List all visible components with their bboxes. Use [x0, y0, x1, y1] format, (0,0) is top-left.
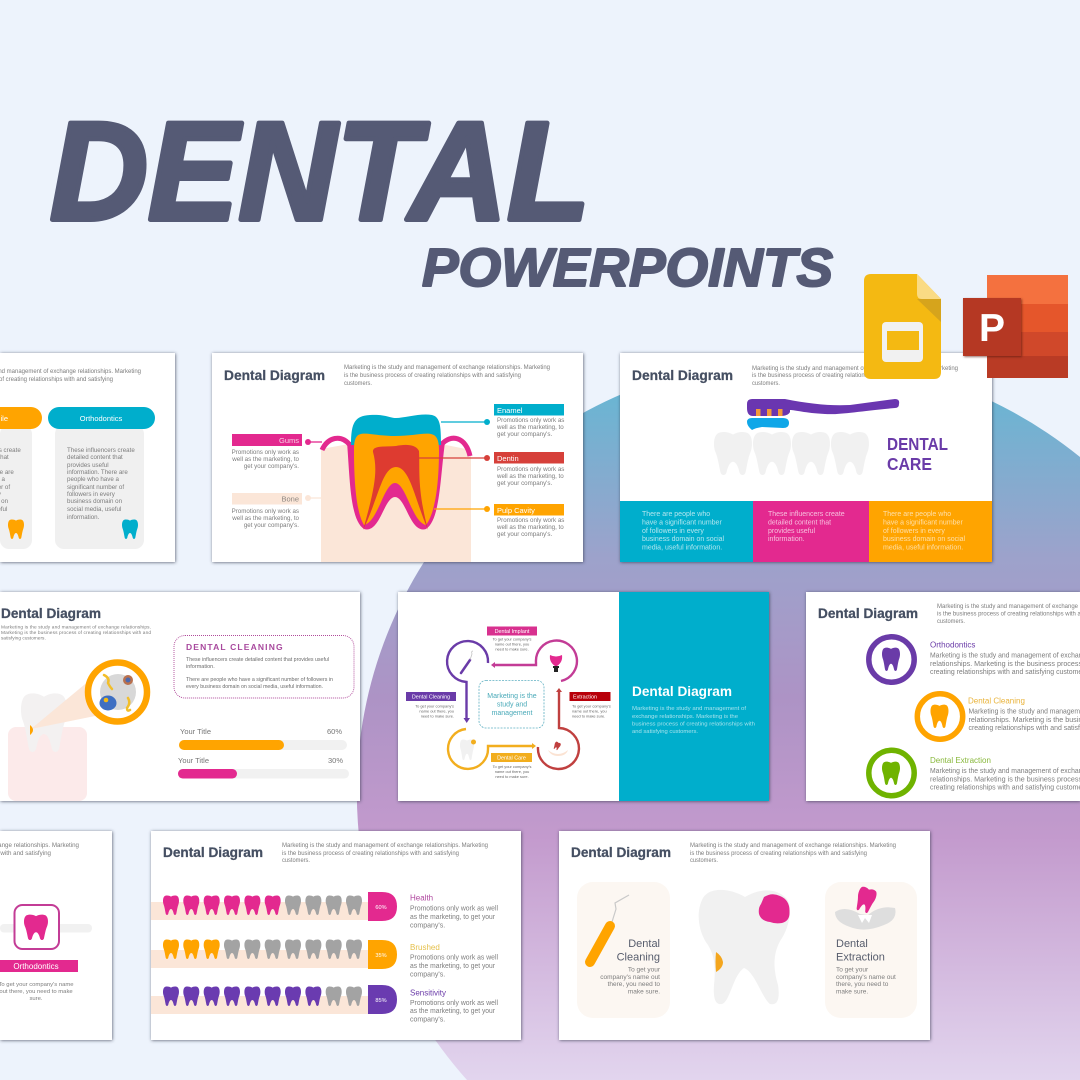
- callout: dental cleaning: DENTAL CLEANING: [186, 642, 284, 652]
- label: Dental Implant: need to make sure.: [495, 646, 529, 652]
- panel: orange: There are people who: [883, 511, 951, 518]
- progress bar: 60%: [179, 727, 347, 750]
- card title: Cleaning: [617, 952, 660, 964]
- card text: To get your: [628, 966, 661, 974]
- arrow head: pink: [491, 662, 495, 668]
- arrow head: red: [556, 688, 562, 692]
- item: Brushed: Promotions only work as well: [410, 954, 498, 962]
- panel: orange: of followers in every: [883, 528, 945, 535]
- right card text: provides useful: [67, 462, 109, 469]
- cycle arc: pink: [494, 641, 577, 681]
- teal side panel: [619, 592, 769, 801]
- center dashed box: Marketing is the: [487, 693, 537, 700]
- slide 7 caption: sure.: [29, 996, 43, 1002]
- label: Extraction: Extraction: [573, 694, 597, 700]
- slide 3 intro text: is the business process of creating relationships with and satisfying: [752, 372, 930, 379]
- slide 2 intro text: is the business process of creating relationships with and satisfying: [344, 372, 522, 379]
- progress bar: 30%: Your Title: [178, 756, 209, 765]
- right card text: people who have a: [67, 476, 120, 483]
- card: Dental Cleaning: [577, 882, 670, 1018]
- label: Bone: well as the marketing, to: [231, 515, 300, 522]
- item: Sensitivity: as the marketing, to get your: [410, 1008, 496, 1015]
- subtitle: POWERPOINTS: POWERPOINTS: [422, 238, 833, 298]
- item: Health: [410, 894, 498, 930]
- cycle arc: purple: [447, 641, 488, 719]
- slide 2 intro text: [344, 364, 551, 387]
- card text: company's name out: [836, 974, 896, 981]
- label: Gums: Promotions only work as: [232, 449, 299, 456]
- label: Pulp Cavity: Promotions only work as: [497, 517, 564, 524]
- slide 7 caption: [0, 982, 74, 1002]
- label: Pulp Cavity: Pulp Cavity: [497, 506, 535, 515]
- icon: dental tool: [461, 651, 473, 673]
- icon: teal tooth: [122, 519, 138, 539]
- panel: pink: detailed content that: [768, 520, 831, 526]
- panel: pink: information.: [768, 536, 805, 543]
- decorative gradient circle: [357, 358, 1080, 1080]
- label: Dentin: well as the marketing, to: [496, 473, 564, 480]
- icon: tooth with spot: [460, 739, 476, 760]
- label: Dental Care: [491, 753, 532, 779]
- arrow head: orange: [532, 743, 536, 749]
- label: Dental Cleaning: To get your company's: [415, 704, 454, 708]
- label bar: Orthodontics: Orthodontics: [13, 962, 59, 971]
- teal side panel: exchange relationships. Marketing is the: [632, 714, 738, 720]
- right card text: information. There are: [67, 469, 128, 476]
- label: Enamel: well as the marketing, to: [496, 424, 564, 431]
- item: Brushed: [410, 943, 498, 978]
- slide 8 heading: Dental Diagram: [163, 845, 263, 860]
- label: Dentin: [419, 452, 564, 487]
- card title: [617, 938, 660, 964]
- tooth cross-section: [322, 415, 470, 530]
- item: Dental Extraction: [930, 756, 1080, 792]
- item: Sensitivity: Sensitivity: [410, 988, 446, 998]
- label: Dental Cleaning: need to make sure.: [421, 714, 454, 718]
- card text: company's name out: [600, 974, 660, 981]
- slide 2: tooth anatomy: [212, 353, 583, 562]
- label: Extraction: [570, 692, 611, 718]
- pill: Orthodontics: [48, 407, 155, 429]
- label: Enamel: Enamel: [497, 406, 523, 415]
- item: Health: Promotions only work as well: [410, 906, 498, 912]
- slide 9 intro text: Marketing is the study and management of exchange relationships. Marketing: [690, 842, 897, 849]
- slide 8 intro text: is the business process of creating relationships with and satisfying: [282, 850, 460, 857]
- card text: To get your: [836, 966, 869, 974]
- callout: dental cleaning: [174, 636, 354, 698]
- title: DENTAL: DENTAL: [50, 92, 590, 250]
- panel: teal: There are people who: [642, 511, 710, 518]
- label: Dentin: Dentin: [497, 454, 519, 463]
- label: Gums: well as the marketing, to: [231, 456, 300, 463]
- slide 3: dental care: [620, 353, 992, 562]
- panel: teal: have a significant number: [642, 520, 722, 526]
- slide 8 intro text: Marketing is the study and management of exchange relationships. Marketing: [282, 842, 489, 849]
- slide 1: pill cards (cropped): [0, 353, 175, 562]
- item: Sensitivity: [410, 988, 498, 1024]
- icon: tooth in rounded square: [14, 905, 59, 949]
- icon: hand with extracted tooth: [548, 741, 568, 756]
- label: Bone: Bone: [281, 494, 299, 504]
- label: Bone: Promotions only work as: [232, 508, 299, 515]
- pill: Smile: [0, 407, 42, 429]
- cycle arc: red: [538, 691, 579, 769]
- label: Pulp Cavity: get your company's.: [497, 531, 552, 538]
- DENTAL CARE label: DENTAL: [887, 434, 948, 454]
- icon: orange tooth: [8, 519, 24, 539]
- slide 4: dental cleaning: [0, 592, 360, 801]
- right card text: [67, 447, 135, 521]
- card: Dental Extraction: [825, 882, 917, 1018]
- center dashed box: [479, 680, 544, 728]
- label: Extraction: name out there, you: [572, 708, 607, 714]
- label: Enamel: [441, 404, 564, 438]
- label: Pulp Cavity: well as the marketing, to: [496, 524, 564, 531]
- panel: teal: [620, 501, 753, 562]
- label: Dental Care: To get your company's: [493, 764, 531, 769]
- item: Dental Extraction: Dental Extraction: [930, 756, 991, 765]
- slide 5: cycle diagram: [398, 592, 769, 801]
- slide 7: orthodontics (cropped): [0, 831, 112, 1040]
- slide 7 caption: out there, you need to make: [0, 989, 73, 995]
- card title: [836, 938, 885, 964]
- plaque: orange: [716, 952, 723, 972]
- slide 4 heading: Dental Diagram: [1, 606, 101, 621]
- label: Gums: get your company's.: [244, 463, 299, 470]
- slide 9 intro text: is the business process of creating relationships with and satisfying: [690, 850, 868, 857]
- item: Health: Health: [410, 894, 433, 902]
- callout: dental cleaning: information.: [186, 664, 215, 670]
- panel: teal: business domain on social: [642, 536, 725, 543]
- card title: Dental: [628, 938, 660, 950]
- right card text: significant number of: [67, 484, 124, 491]
- label: Dental Cleaning: name out there, you: [419, 708, 454, 714]
- panel: pink: [753, 501, 869, 562]
- gray card left: [0, 425, 32, 549]
- pictogram row: 35%: 35%: [375, 953, 387, 959]
- label: Enamel: get your company's.: [497, 431, 552, 438]
- callout: dental cleaning: every business domain on social media, useful information.: [186, 684, 323, 690]
- panel: pink: provides useful: [768, 528, 816, 535]
- label: Extraction: To get your company's: [572, 704, 611, 708]
- card text: make sure.: [836, 988, 868, 996]
- left card text: [0, 447, 21, 513]
- right card text: detailed content that: [67, 454, 123, 461]
- slide 6 intro text: customers.: [937, 618, 965, 625]
- pictogram row: 60%: [151, 892, 397, 921]
- panel: pink: These influencers create: [768, 511, 845, 518]
- center dashed box: study and: [497, 702, 527, 708]
- large tooth: [699, 890, 790, 1004]
- slide 2 intro text: Marketing is the study and management of exchange relationships. Marketing: [344, 364, 551, 371]
- label: Dental Implant: To get your company's: [493, 636, 531, 642]
- item: Sensitivity: company's.: [410, 1016, 445, 1024]
- right card text: information.: [67, 514, 100, 521]
- arrow head: purple: [464, 718, 470, 723]
- label: Dental Care: need to make sure.: [495, 774, 529, 779]
- item: Sensitivity: Promotions only work as well: [410, 1000, 498, 1007]
- DENTAL CARE label: CARE: [887, 454, 932, 474]
- item: Dental Cleaning: [968, 696, 1080, 732]
- label: Pulp Cavity: [434, 504, 564, 538]
- slide 3 intro text: customers.: [752, 380, 780, 387]
- pictogram row: 60%: 60%: [375, 905, 387, 911]
- card text: [600, 966, 661, 996]
- slide 8 intro text: customers.: [282, 857, 310, 864]
- slide 1 intro text: [0, 368, 142, 383]
- panel: orange: media, useful information.: [883, 544, 963, 552]
- slide 3 intro text: [752, 365, 959, 387]
- label: Dental Care: name out there, you: [495, 769, 529, 774]
- label: Bone: get your company's.: [244, 522, 299, 529]
- slide 2 intro text: customers.: [344, 380, 372, 387]
- illustration: magnified tooth germs: [8, 662, 147, 801]
- slide 9 intro text: [690, 842, 897, 864]
- label: Dental Implant: name out there, you: [495, 642, 529, 646]
- teal side panel: business process of creating relationships with: [632, 722, 755, 728]
- cavity: pink: [759, 894, 790, 923]
- slide 4 intro text: Marketing is the study and management of exchange relationships.: [1, 624, 151, 630]
- progress bar: 60%: 60%: [327, 727, 342, 736]
- icon: implant: [550, 655, 562, 672]
- row of pale teeth: [714, 432, 869, 475]
- pictogram row: 35%: [151, 939, 397, 969]
- item: Brushed: company's.: [410, 972, 445, 978]
- icon: orange tooth circle: [917, 694, 963, 739]
- slide 6 intro text: [937, 603, 1080, 625]
- gray card right: [55, 425, 144, 549]
- label: Dental Care: Dental Care: [497, 756, 526, 762]
- pill: Orthodontics: Orthodontics: [80, 414, 123, 423]
- progress bar: 60%: Your Title: [180, 727, 211, 736]
- card title: Extraction: [836, 952, 885, 964]
- label: Dental Cleaning: Dental Cleaning: [412, 694, 450, 700]
- panel: teal: of followers in every: [642, 528, 704, 535]
- item: Dental Cleaning: Dental Cleaning: [968, 696, 1025, 706]
- label: Gums: [231, 434, 322, 470]
- item: Orthodontics: [930, 640, 1080, 676]
- label: Dental Implant: [487, 626, 537, 652]
- toothpaste: [747, 418, 789, 430]
- slide 7 intro text: [0, 842, 80, 857]
- gray track: [0, 924, 92, 932]
- item: Health: as the marketing, to get your: [410, 914, 496, 921]
- label: Dental Cleaning: [406, 692, 456, 718]
- card title: Dental: [836, 938, 868, 950]
- panel: orange: business domain on social: [883, 536, 966, 543]
- slide 3 heading: Dental Diagram: [632, 368, 733, 383]
- item: Health: company's.: [410, 922, 445, 930]
- label: Bone: [231, 493, 321, 529]
- slide 4 intro text: satisfying customers.: [1, 636, 46, 642]
- teal side panel: Dental Diagram: [632, 684, 732, 699]
- label: Extraction: need to make sure.: [572, 714, 605, 718]
- item: Brushed: Brushed: [410, 943, 440, 952]
- card text: make sure.: [628, 988, 660, 996]
- DENTAL CARE label: [887, 434, 948, 474]
- teal side panel: and satisfying customers.: [632, 729, 698, 735]
- icon: Google Slides: [864, 274, 941, 379]
- progress bar: 30%: 30%: [328, 756, 343, 765]
- slide 4 intro text: [1, 624, 151, 642]
- pictogram row: 85%: 85%: [375, 998, 387, 1004]
- slide 6: three services: [806, 592, 1080, 801]
- slide 3 intro text: Marketing is the study and management of exchange relationships. Marketing: [752, 365, 959, 372]
- pictogram row: 85%: [151, 985, 397, 1014]
- slide 9 heading: Dental Diagram: [571, 845, 671, 860]
- slide 7 caption: To get your company's name: [0, 982, 74, 988]
- panel: orange: have a significant number: [883, 520, 963, 526]
- label bar: Orthodontics: [0, 960, 78, 972]
- callout: dental cleaning: These influencers create detailed content that provides useful: [186, 657, 329, 663]
- toothbrush: [747, 399, 899, 416]
- label: Dentin: Promotions only work as: [497, 466, 564, 473]
- slide 2 heading: Dental Diagram: [224, 368, 325, 383]
- cycle arc: orange: [448, 729, 533, 769]
- label: Gums: Gums: [279, 436, 299, 445]
- right card text: These influencers create: [67, 447, 135, 454]
- label: Dental Implant: Dental Implant: [495, 629, 530, 635]
- card text: there, you need to: [608, 981, 660, 988]
- card text: [836, 966, 896, 996]
- slide 8: tooth pictograms: [151, 831, 521, 1040]
- icon: purple tooth circle: [869, 637, 914, 682]
- label: Dentin: get your company's.: [497, 480, 552, 487]
- icon: green tooth circle: [869, 750, 914, 796]
- icon: PowerPoint: [963, 275, 1068, 378]
- card text: there, you need to: [836, 981, 889, 988]
- panel: orange: [869, 501, 992, 562]
- slide 8 intro text: [282, 842, 489, 864]
- right card text: followers in every: [67, 491, 116, 498]
- item: Brushed: as the marketing, to get your: [410, 963, 496, 970]
- slide 4 intro text: Marketing is the business process of creating relationships with and: [1, 630, 151, 636]
- icon: extracted tooth: [835, 886, 896, 930]
- item: Orthodontics: Orthodontics: [930, 640, 975, 650]
- label: Enamel: Promotions only work as: [497, 417, 564, 424]
- panel: teal: media, useful information.: [642, 544, 722, 552]
- icon: PowerPoint: P: [979, 307, 1005, 350]
- teal side panel: Marketing is the study and management of: [632, 706, 746, 712]
- slide 9 intro text: customers.: [690, 857, 718, 864]
- icon: dental scaler: [590, 895, 629, 962]
- callout: dental cleaning: There are people who have a significant number of followers in: [186, 677, 333, 683]
- slide 6 heading: Dental Diagram: [818, 606, 918, 621]
- progress bar: 30%: [178, 756, 349, 778]
- center dashed box: management: [492, 710, 532, 717]
- bone background: [321, 444, 471, 562]
- slide 9: cleaning and extraction: [559, 831, 930, 1040]
- right card text: social media, useful: [67, 506, 121, 513]
- right card text: business domain on: [67, 498, 123, 505]
